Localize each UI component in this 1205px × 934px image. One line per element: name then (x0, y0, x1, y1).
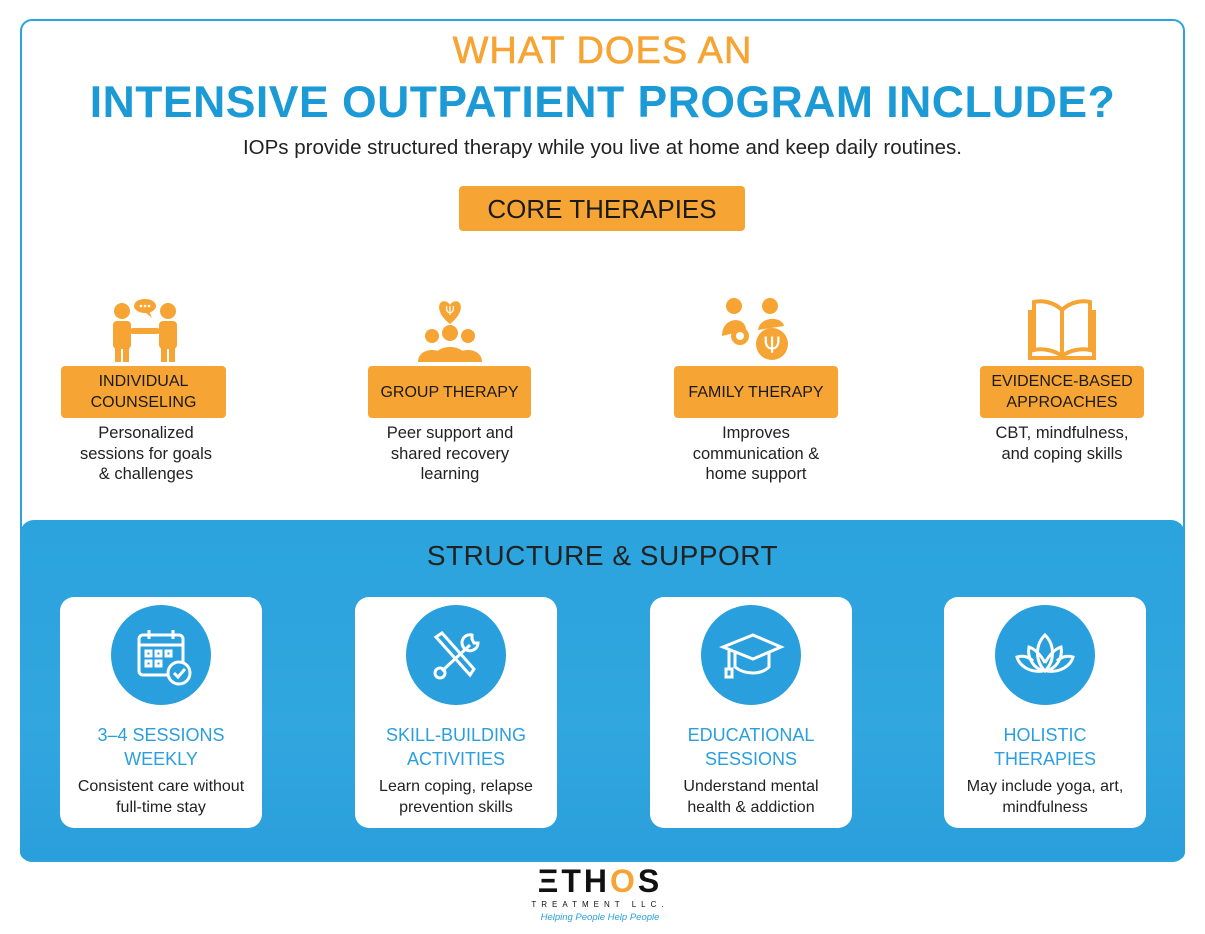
card: skill-building: Learn coping, relapse (379, 778, 533, 795)
core therapies heading: CORE THERAPIES (487, 194, 717, 224)
desc: evidence: and coping skills (1001, 444, 1123, 462)
icon: group therapy (418, 301, 482, 362)
heading: structure & support: STRUCTURE & SUPPORT (427, 540, 778, 571)
title line 1: WHAT DOES AN (453, 30, 752, 72)
icon: grad cap (701, 605, 801, 705)
core therapies heading (459, 186, 745, 231)
card: sessions: full-time stay (116, 798, 206, 816)
label: individual counseling: INDIVIDUAL (99, 373, 188, 390)
label: individual counseling: COUNSELING (91, 394, 196, 411)
desc: group (387, 424, 513, 483)
desc: individual (80, 424, 212, 483)
label: evidence-based: APPROACHES (1006, 394, 1118, 411)
subtitle: IOPs provide structured therapy while you live at home and keep daily routines. (243, 136, 962, 159)
card: holistic: HOLISTIC (1003, 725, 1086, 745)
card: skill-building: SKILL-BUILDING (386, 725, 526, 745)
desc: group: learning (421, 465, 479, 483)
card: holistic: May include yoga, art, (967, 778, 1123, 795)
card: sessions: Consistent care without (78, 778, 244, 795)
card: skill-building: prevention skills (399, 798, 513, 816)
desc: family: Improves (722, 424, 790, 442)
logo (531, 863, 669, 923)
label: evidence-based: EVIDENCE-BASED (991, 373, 1133, 390)
icon: book (1028, 299, 1096, 360)
card: sessions: WEEKLY (124, 749, 198, 769)
icon: group therapy: Ψ (445, 304, 455, 318)
desc: individual: Personalized (98, 424, 194, 442)
card: holistic (944, 597, 1146, 828)
card: skill-building (355, 597, 557, 828)
desc: family: home support (706, 465, 806, 483)
desc: group: Peer support and (387, 424, 513, 442)
card: sessions: 3–4 SESSIONS (97, 725, 225, 745)
logo: ΞTHOS (538, 863, 662, 899)
desc: individual: & challenges (99, 465, 193, 483)
label: individual counseling (61, 366, 226, 418)
desc: family (693, 424, 819, 483)
logo: Helping People Help People (541, 912, 659, 923)
icon: tools (406, 605, 506, 705)
label: family therapy: FAMILY THERAPY (688, 384, 824, 400)
card: holistic: THERAPIES (994, 749, 1096, 769)
card: educational (650, 597, 852, 828)
icon: family therapy: Ψ (763, 334, 781, 359)
desc: evidence: CBT, mindfulness, (996, 424, 1128, 442)
icon: calendar (111, 605, 211, 705)
desc: group: shared recovery (391, 444, 509, 462)
card: educational: health & addiction (687, 798, 815, 816)
icon: individual counseling (113, 299, 177, 362)
panel: structure & support (20, 520, 1185, 860)
logo: TREATMENT LLC. (531, 900, 669, 909)
icon: lotus (995, 605, 1095, 705)
label: group therapy: GROUP THERAPY (380, 384, 519, 400)
card: sessions (60, 597, 262, 828)
icon: family therapy (722, 298, 788, 360)
desc: evidence (996, 424, 1128, 462)
card: holistic: mindfulness (1002, 798, 1088, 816)
desc: family: communication & (693, 444, 819, 462)
card: educational: Understand mental (683, 778, 819, 795)
label: evidence-based (980, 366, 1144, 418)
label: family therapy (674, 366, 838, 418)
label: group therapy (368, 366, 531, 418)
card: educational: EDUCATIONAL (688, 725, 814, 745)
desc: individual: sessions for goals (80, 444, 212, 462)
card: skill-building: ACTIVITIES (407, 749, 505, 769)
card: educational: SESSIONS (705, 749, 797, 769)
title line 2: INTENSIVE OUTPATIENT PROGRAM INCLUDE? (90, 78, 1115, 127)
